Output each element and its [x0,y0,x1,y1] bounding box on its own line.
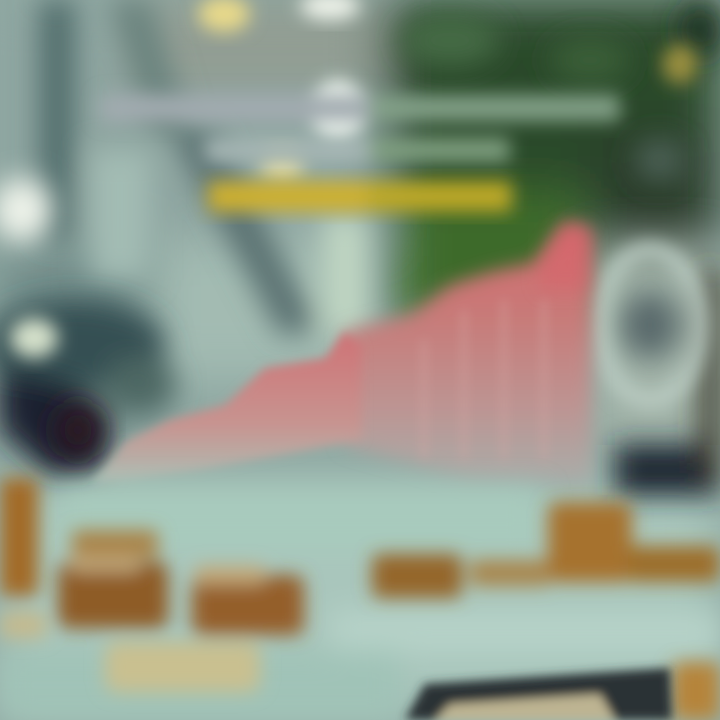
dark object, left middle [0,300,176,475]
chart peak highlight [540,224,590,290]
faint vertical chart stripes [504,310,544,312]
area chart: rising red growth curve [90,222,592,486]
dark diagonal beams, left [40,0,368,335]
ring shape, right [600,250,700,400]
left section of the chart [90,332,362,486]
dark red accent [54,402,102,458]
ceiling and wall lights [0,0,698,358]
foliage highlights [400,2,720,182]
dark shape, right [615,270,720,495]
stacks of gold coins [0,478,720,720]
table surface [0,490,720,720]
full chart area [345,222,592,485]
highlighted subtitle band [208,181,512,212]
dark tablet, bottom right [405,668,672,720]
title text band, blurred [100,95,620,162]
